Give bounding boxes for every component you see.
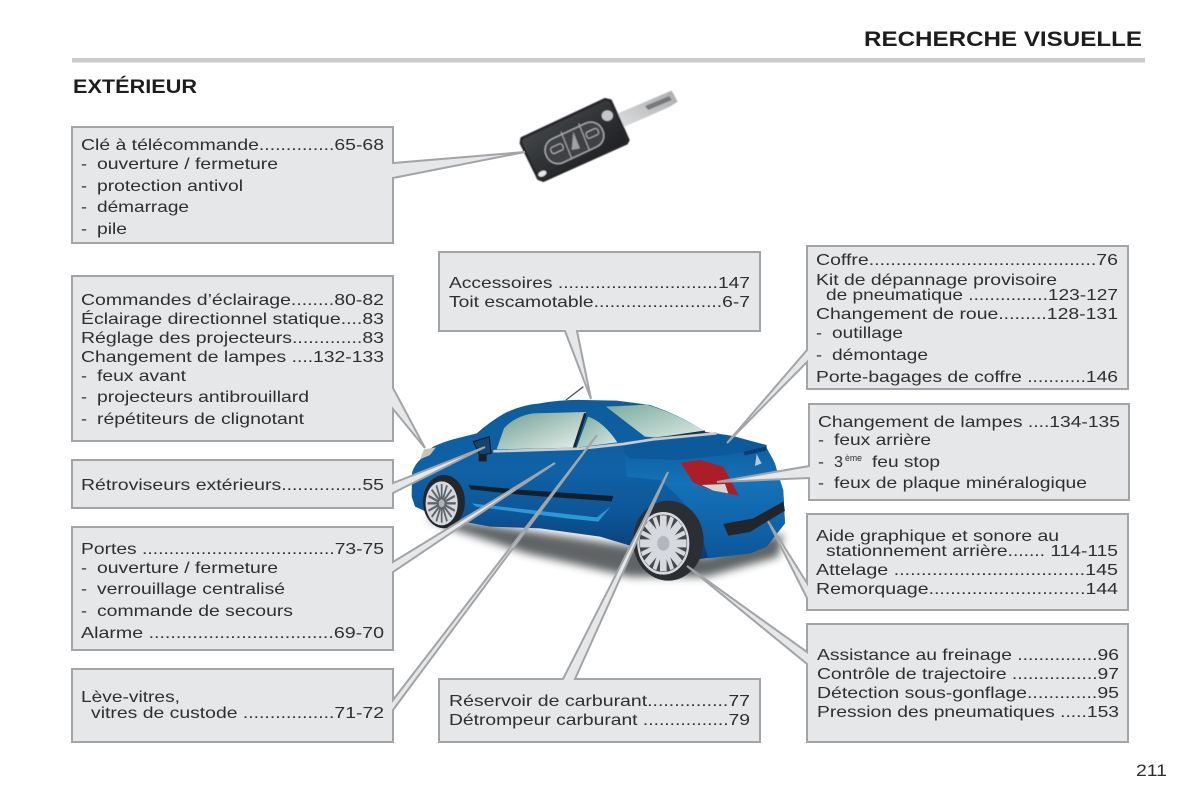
panel: assistance au freinage: Assistance au freinage ...............96 bbox=[817, 647, 1119, 664]
panel: clé à télécommande: démarrage bbox=[97, 199, 189, 216]
bumper strip bbox=[723, 502, 785, 536]
panel: rétroviseurs bbox=[72, 447, 485, 508]
panel: changement de lampes arrière: ème bbox=[845, 453, 862, 464]
antenna bbox=[566, 387, 583, 400]
car body bbox=[412, 400, 785, 560]
panel: commandes d'éclairage: Changement de lampes ....132-133 bbox=[81, 349, 384, 366]
panel: commandes d'éclairage: Éclairage directionnel statique....83 bbox=[81, 309, 384, 328]
panel: coffre: de pneumatique ...............123-127 bbox=[826, 287, 1118, 304]
panel: commandes d'éclairage: Réglage des projecteurs.............83 bbox=[81, 330, 384, 347]
side window bbox=[497, 412, 586, 449]
panel: portes: Portes ....................................73-75 bbox=[81, 541, 384, 558]
panel: clé à télécommande bbox=[72, 127, 525, 243]
panel: coffre: Porte-bagages de coffre ...........146 bbox=[816, 369, 1118, 386]
panel: réservoir de carburant bbox=[439, 472, 760, 742]
side trim bbox=[468, 485, 613, 501]
panel: coffre: - bbox=[816, 325, 822, 342]
panel: commandes d'éclairage: - bbox=[81, 368, 87, 385]
panel: coffre: démontage bbox=[832, 347, 928, 364]
trunk lid bbox=[623, 435, 767, 460]
icon: remote key bbox=[521, 91, 678, 181]
section heading: EXTÉRIEUR bbox=[73, 76, 197, 98]
panel: coffre: Kit de dépannage provisoire bbox=[816, 272, 1057, 289]
panel: portes: - bbox=[81, 560, 87, 577]
rear quarter window bbox=[577, 417, 617, 448]
panel: aide graphique: Remorquage.............................144 bbox=[816, 581, 1118, 598]
panel: lève-vitres: vitres de custode .................71-72 bbox=[91, 705, 384, 722]
rear spoiler and logo bbox=[743, 447, 767, 455]
panel: clé à télécommande: - bbox=[81, 178, 87, 195]
panel: accessoires: Toit escamotable........................6-7 bbox=[449, 294, 750, 311]
panel: clé à télécommande: - bbox=[81, 156, 87, 173]
sill highlight bbox=[472, 503, 611, 522]
panel: clé à télécommande: - bbox=[81, 221, 87, 238]
panel: changement de lampes arrière: Changement de lampes ....134-135 bbox=[818, 414, 1120, 431]
panel: changement de lampes arrière: feux de plaque minéralogique bbox=[834, 475, 1087, 492]
panel: portes: ouverture / fermeture bbox=[97, 560, 278, 577]
panel: changement de lampes arrière: - bbox=[818, 475, 824, 492]
panel: coffre bbox=[727, 246, 1128, 443]
panel: changement de lampes arrière: - bbox=[818, 432, 824, 449]
panel: assistance au freinage: Pression des pneumatiques .....153 bbox=[817, 704, 1119, 721]
panel: portes: - bbox=[81, 581, 87, 598]
panel: aide graphique: Aide graphique et sonore au bbox=[816, 528, 1059, 545]
panel: aide graphique bbox=[768, 514, 1128, 610]
panel: aide graphique: stationnement arrière....... 114-115 bbox=[826, 543, 1118, 560]
panel: lève-vitres: Lève-vitres, bbox=[81, 689, 180, 706]
panel: réservoir de carburant: Détrompeur carburant ................79 bbox=[449, 712, 750, 729]
panel: accessoires bbox=[439, 252, 760, 399]
panel: commandes d'éclairage: - bbox=[81, 389, 87, 406]
rear wheel bbox=[633, 501, 704, 581]
panel: coffre: outillage bbox=[832, 325, 903, 342]
rear window bbox=[606, 405, 705, 437]
headlight bbox=[420, 447, 436, 459]
panel: portes: - bbox=[81, 603, 87, 620]
panel: commandes d'éclairage: feux avant bbox=[97, 368, 187, 385]
mirror bbox=[473, 437, 491, 455]
panel: rétroviseurs: Rétroviseurs extérieurs...............55 bbox=[81, 477, 384, 494]
panel: coffre: - bbox=[816, 347, 822, 364]
panel: changement de lampes arrière: 3 bbox=[834, 454, 843, 471]
panel: portes: Alarme ..................................69-70 bbox=[81, 625, 384, 642]
panel: changement de lampes arrière: feux arrière bbox=[834, 432, 931, 449]
panel: commandes d'éclairage: Commandes d’éclairage........80-82 bbox=[81, 292, 384, 309]
panel: réservoir de carburant: Réservoir de carburant...............77 bbox=[449, 693, 750, 710]
front wheel bbox=[423, 475, 465, 528]
panel: changement de lampes arrière: - bbox=[818, 454, 824, 471]
panel: clé à télécommande: - bbox=[81, 199, 87, 216]
panel: clé à télécommande: pile bbox=[97, 221, 127, 238]
belt line bbox=[493, 433, 717, 451]
page number: 211 bbox=[1136, 761, 1167, 780]
panel: portes: verrouillage centralisé bbox=[97, 581, 285, 598]
panel: assistance au freinage: Contrôle de trajectoire ................97 bbox=[817, 666, 1119, 683]
car shadow bbox=[423, 518, 783, 577]
car illustration bbox=[412, 387, 785, 581]
panel: coffre: Changement de roue.........128-131 bbox=[816, 306, 1118, 323]
panel: assistance au freinage: Détection sous-gonflage.............95 bbox=[817, 685, 1119, 702]
panel: commandes d'éclairage: répétiteurs de clignotant bbox=[97, 411, 305, 428]
rear wing bbox=[623, 435, 785, 558]
panel: changement de lampes arrière: feu stop bbox=[872, 454, 940, 471]
panel: commandes d'éclairage: projecteurs antibrouillard bbox=[97, 389, 309, 406]
panel: aide graphique: Attelage ...................................145 bbox=[816, 562, 1118, 579]
panel: commandes d'éclairage: - bbox=[81, 411, 87, 428]
panel: commandes d'éclairage bbox=[72, 276, 425, 448]
panel: portes bbox=[72, 463, 555, 650]
panel: changement de lampes arrière bbox=[717, 404, 1129, 500]
panel: clé à télécommande: protection antivol bbox=[97, 178, 243, 195]
panel: clé à télécommande: ouverture / fermeture bbox=[97, 156, 278, 173]
panel: lève-vitres bbox=[72, 435, 597, 742]
tail light bbox=[681, 460, 739, 496]
panel: clé à télécommande: Clé à télécommande..............65-68 bbox=[81, 137, 384, 154]
panel: coffre: Coffre..........................................76 bbox=[816, 252, 1118, 269]
panel: assistance au freinage bbox=[687, 566, 1128, 742]
page title: RECHERCHE VISUELLE bbox=[864, 28, 1142, 51]
panel: accessoires: Accessoires ..............................147 bbox=[449, 275, 750, 292]
panel: portes: commande de secours bbox=[97, 603, 293, 620]
